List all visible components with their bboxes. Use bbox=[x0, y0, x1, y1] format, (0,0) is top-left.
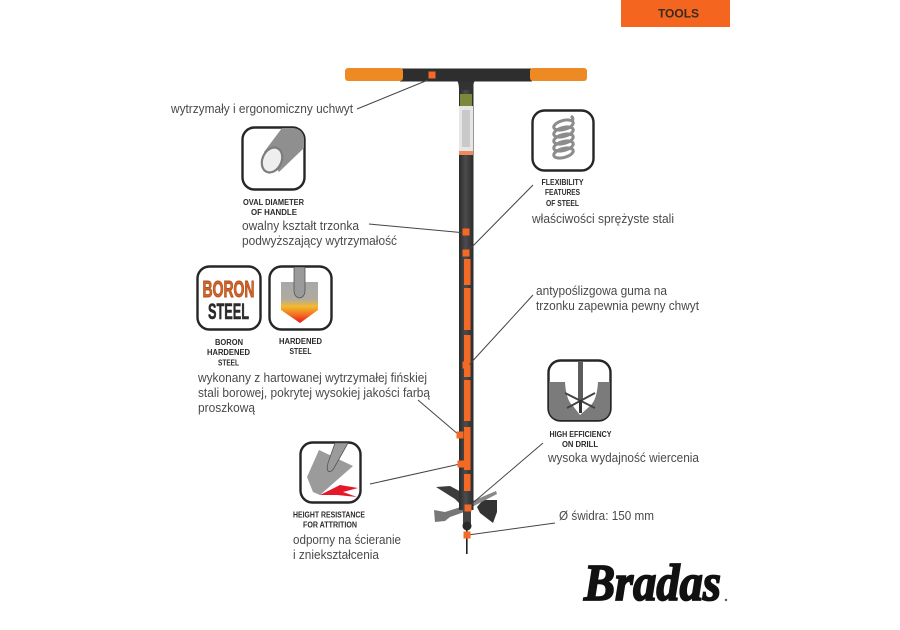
caption: FEATURES bbox=[545, 188, 581, 197]
panel: attrition bbox=[293, 442, 401, 562]
shaft bbox=[459, 84, 474, 510]
text: auger diameter: Ø świdra: 150 mm bbox=[559, 509, 654, 523]
anti-slip rubber strips bbox=[464, 259, 470, 491]
tag: TOOLS bbox=[621, 0, 730, 27]
description: i zniekształcenia bbox=[293, 548, 379, 562]
caption bbox=[293, 510, 366, 530]
marker dots bbox=[428, 72, 472, 538]
icon: worn shovel bbox=[300, 442, 360, 502]
tag: TOOLS: TOOLS bbox=[658, 6, 699, 20]
caption bbox=[550, 430, 612, 449]
auger blades bbox=[434, 486, 497, 523]
caption: HIGH EFFICIENCY bbox=[550, 430, 612, 439]
description bbox=[197, 371, 430, 415]
caption: OF STEEL bbox=[546, 199, 579, 208]
caption: hardened: STEEL bbox=[290, 347, 312, 356]
text: anti-slip rubber bbox=[536, 284, 699, 313]
caption: ON DRILL bbox=[562, 440, 598, 449]
caption: OF HANDLE bbox=[251, 208, 298, 217]
shaft label bbox=[459, 94, 473, 155]
caption: hardened: HARDENED bbox=[279, 337, 322, 346]
caption bbox=[542, 178, 584, 208]
icon: spring bbox=[532, 110, 594, 170]
description: właściwości sprężyste stali bbox=[531, 212, 674, 226]
caption: HEIGHT RESISTANCE bbox=[293, 510, 366, 520]
description: wykonany z hartowanej wytrzymałej fińskiej bbox=[197, 371, 427, 385]
icon: oval tube bbox=[242, 128, 304, 190]
icon: hardened shovel bbox=[270, 266, 332, 330]
description: owalny kształt trzonka bbox=[242, 219, 359, 233]
text: handle: wytrzymały i ergonomiczny uchwyt bbox=[170, 102, 353, 116]
description: stali borowej, pokrytej wysokiej jakości farbą bbox=[198, 386, 430, 400]
panel: oval diameter bbox=[242, 128, 397, 248]
panel: flexibility bbox=[531, 110, 674, 226]
description: podwyższający wytrzymałość bbox=[242, 234, 397, 248]
caption: boron: HARDENED bbox=[207, 348, 250, 357]
description bbox=[242, 219, 397, 248]
description: proszkową bbox=[198, 401, 255, 415]
text: anti-slip rubber: trzonku zapewnia pewny chwyt bbox=[536, 299, 699, 313]
icon: drill in soil bbox=[548, 360, 610, 420]
caption: boron: BORON bbox=[215, 338, 243, 347]
panel: drilling bbox=[547, 360, 699, 465]
icon: boron steel: STEEL bbox=[208, 299, 249, 324]
description: wysoka wydajność wiercenia bbox=[547, 451, 699, 465]
caption: FLEXIBILITY bbox=[542, 178, 584, 187]
description: odporny na ścieranie bbox=[293, 533, 401, 547]
panel: boron steel bbox=[197, 266, 430, 415]
caption bbox=[243, 198, 304, 217]
icon: boron steel bbox=[198, 266, 260, 330]
caption: boron bbox=[207, 338, 250, 368]
caption: FOR ATTRITION bbox=[303, 520, 357, 530]
caption: boron: STEEL bbox=[218, 358, 239, 368]
caption: hardened bbox=[279, 337, 322, 356]
text: anti-slip rubber: antypoślizgowa guma na bbox=[536, 284, 667, 298]
description bbox=[293, 533, 401, 562]
icon: boron steel: BORON bbox=[202, 276, 254, 302]
handle bbox=[345, 68, 587, 82]
leader lines bbox=[357, 80, 555, 535]
tool: soil auger bbox=[345, 68, 587, 554]
logo: Bradas: Bradas bbox=[583, 555, 721, 612]
caption: OVAL DIAMETER bbox=[243, 198, 304, 207]
